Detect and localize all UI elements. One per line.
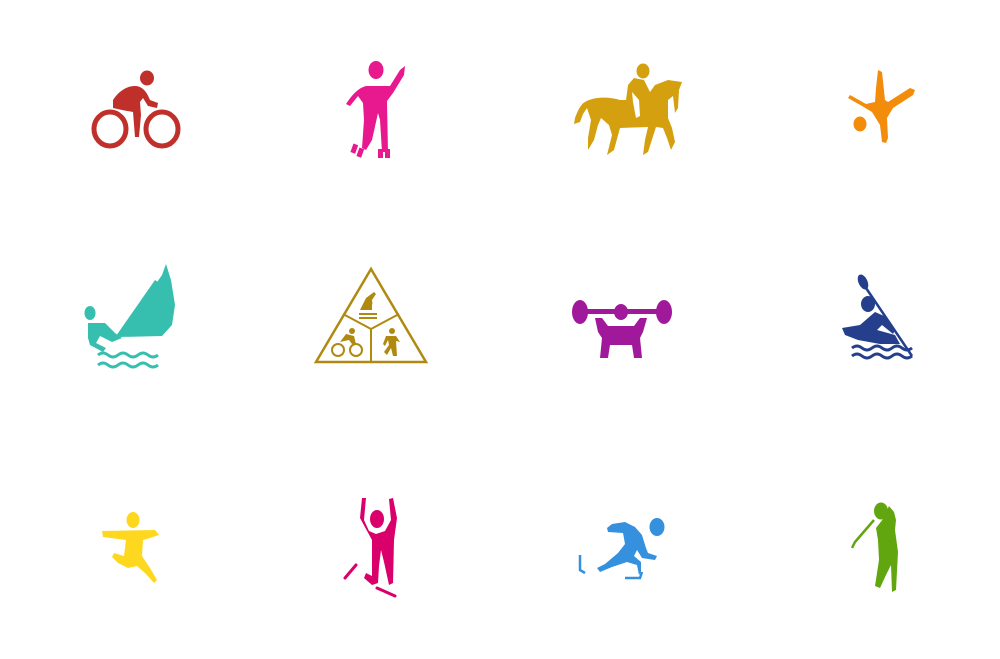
- icon: golf: [852, 502, 898, 592]
- icon: cycling: [94, 70, 178, 146]
- icon: equestrian: [574, 64, 682, 155]
- icon: gymnastics: [848, 70, 915, 143]
- icon: weightlifting: [572, 300, 672, 358]
- icon: figure skating: [345, 498, 397, 596]
- icon: sailing: [84, 264, 175, 367]
- icon: speed skating: [580, 518, 664, 578]
- icon: roller skating: [346, 61, 405, 158]
- icon: wushu / martial arts: [102, 512, 159, 583]
- icon: canoe kayak: [842, 273, 912, 358]
- icon: triathlon: [316, 269, 426, 362]
